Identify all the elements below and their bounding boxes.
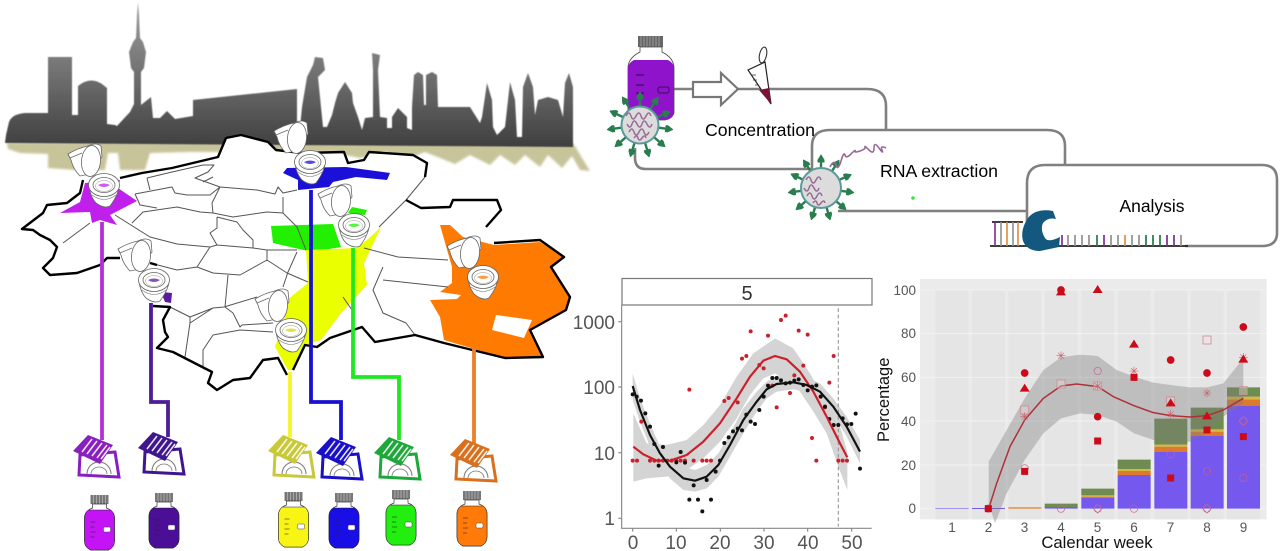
bars: purple	[935, 406, 1260, 509]
sampler: blue	[316, 437, 362, 479]
virus: releasing RNA	[788, 144, 886, 221]
y tick labels: 60	[901, 370, 916, 385]
green speck	[911, 196, 915, 200]
workflow diagram	[607, 36, 1277, 251]
trend line	[989, 384, 1243, 509]
microtube	[748, 46, 771, 104]
pipe: dark purple	[151, 303, 168, 437]
bars: green	[1045, 387, 1260, 507]
red points	[633, 316, 847, 461]
y tick labels: 80	[901, 326, 916, 341]
x tick labels: 8	[1203, 520, 1211, 535]
sampler: purple	[73, 435, 119, 477]
grid lines	[920, 290, 1267, 509]
toilet: blue	[274, 121, 326, 184]
filled triangles	[1020, 285, 1248, 419]
x tick labels: 9	[1240, 520, 1247, 535]
bottle: purple	[84, 495, 114, 550]
y tick labels: 20	[901, 458, 916, 473]
ribbon: red series	[633, 338, 847, 490]
facet header: 5	[741, 283, 753, 305]
sampler: orange	[450, 439, 496, 481]
bottle: green	[386, 490, 416, 545]
toilet: yellow	[255, 289, 306, 352]
filled circles	[1025, 290, 1243, 417]
ribbon: black series	[633, 373, 860, 492]
map outline	[22, 135, 570, 390]
y tick labels	[893, 283, 916, 516]
x tick labels: 3	[1021, 520, 1028, 535]
DNA strand	[990, 222, 1188, 246]
bottle: yellow	[278, 492, 308, 547]
x tick labels: 7	[1167, 520, 1174, 535]
panel background	[920, 279, 1267, 519]
open markers	[985, 336, 1248, 513]
confidence ribbon	[989, 355, 1243, 523]
toilet: green	[318, 184, 370, 247]
map of districts	[22, 135, 570, 390]
inner district borders	[63, 165, 448, 367]
samplers	[73, 432, 496, 481]
text: concentration: Concentration	[705, 120, 815, 140]
black points	[633, 378, 860, 511]
bottle: dark purple	[149, 493, 179, 548]
sample bottles	[84, 490, 487, 550]
y axis labels: 1000	[573, 313, 615, 334]
y axis title: Percentage	[875, 358, 893, 442]
filled squares	[988, 377, 1243, 509]
y axis labels: 10	[594, 444, 615, 465]
bottle: orange	[457, 491, 487, 546]
plot area	[920, 279, 1267, 523]
region: blue	[283, 167, 390, 190]
skyline reflection	[7, 143, 590, 171]
bars: yellow	[1081, 397, 1260, 497]
step box: analysis	[1027, 165, 1277, 246]
red trend	[633, 356, 847, 461]
large bottle	[628, 36, 674, 120]
region: green	[271, 207, 367, 252]
bottle: blue	[329, 493, 359, 548]
city skyline	[5, 2, 590, 171]
pipe: yellow	[288, 372, 292, 437]
stacked bar chart	[875, 279, 1267, 551]
sewer pipes	[102, 190, 474, 445]
x tick labels: 1	[948, 520, 956, 535]
plot area	[618, 305, 872, 532]
text: RNA extraction: RNA extraction	[880, 161, 998, 181]
step box: concentration	[635, 89, 886, 169]
region: dark purple	[162, 292, 172, 303]
toilet: dark purple	[118, 239, 170, 302]
y axis labels: 1	[604, 509, 615, 530]
pipe: orange	[472, 348, 476, 445]
y axis labels	[573, 313, 615, 530]
toilet: purple	[68, 144, 120, 207]
sampler: yellow	[268, 435, 314, 477]
x tick labels: 2	[985, 520, 992, 535]
region: yellow	[275, 227, 381, 370]
y tick labels: 0	[908, 501, 916, 516]
region: purple	[60, 180, 137, 225]
text: analysis: Analysis	[1120, 196, 1185, 216]
columns	[935, 290, 1260, 519]
y tick labels: 100	[893, 283, 916, 298]
step box: RNA extraction	[812, 130, 1065, 211]
y tick labels: 40	[901, 414, 916, 429]
pipe: green	[353, 248, 399, 440]
time series chart	[573, 278, 872, 551]
pipe: purple	[100, 222, 104, 440]
black trend	[633, 382, 860, 481]
y axis labels: 100	[583, 378, 615, 399]
sampler: green	[374, 437, 420, 479]
x tick labels: 5	[1094, 520, 1101, 535]
region: orange	[430, 225, 570, 358]
axes	[618, 305, 872, 532]
x tick labels	[948, 520, 1247, 535]
toilets	[68, 121, 498, 352]
map base	[22, 135, 570, 390]
facet header	[622, 278, 872, 305]
arrow	[693, 73, 738, 105]
threshold line	[837, 308, 840, 527]
toilet: orange	[447, 236, 498, 299]
pipe: blue	[311, 190, 341, 440]
x tick labels: 6	[1130, 520, 1138, 535]
skyline silhouette	[5, 2, 573, 147]
bars: orange	[1008, 399, 1260, 509]
sampler: dark purple	[138, 432, 184, 474]
virus: intact	[607, 92, 673, 158]
x tick labels: 4	[1057, 520, 1065, 535]
enzyme	[1022, 210, 1060, 251]
x axis labels	[628, 533, 863, 551]
